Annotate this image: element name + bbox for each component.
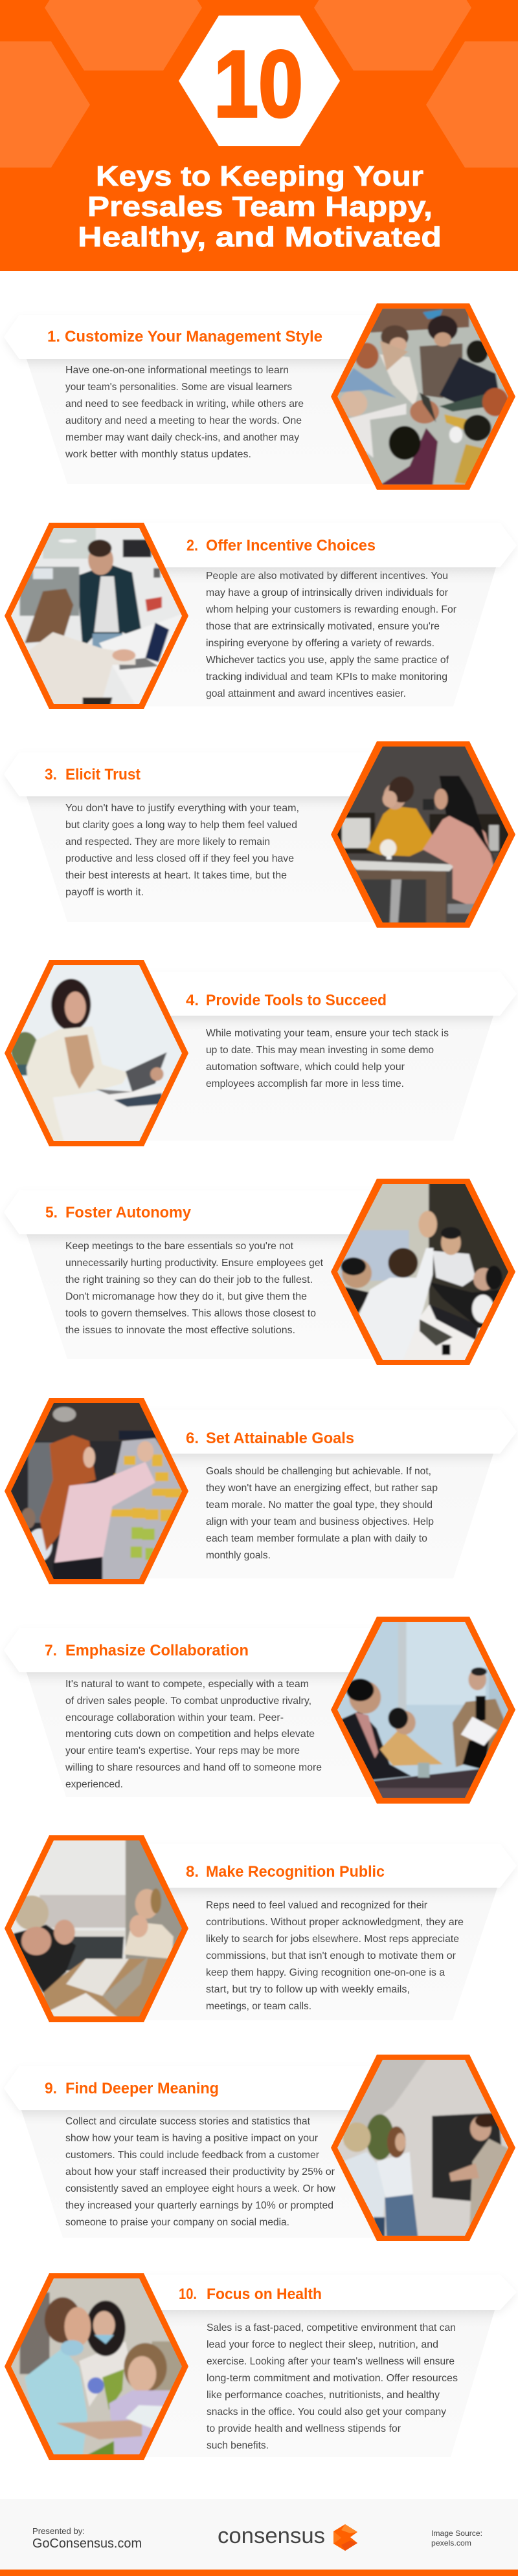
body text 3	[65, 803, 299, 898]
logo wordmark: consensus	[218, 2524, 325, 2548]
heading 9: 9.	[45, 2080, 57, 2097]
image source	[431, 2529, 482, 2548]
body text 8: meetings, or team calls.	[206, 2001, 311, 2012]
photo 8: colleagues clapping	[0, 1835, 192, 2025]
body text 7	[65, 1679, 322, 1790]
body text 5: Keep meetings to the bare essentials so you're not	[65, 1241, 294, 1252]
body text 10	[207, 2322, 458, 2451]
body text 6: monthly goals.	[206, 1550, 271, 1561]
body text 7: experienced.	[65, 1779, 123, 1790]
heading 4: 4.	[186, 992, 199, 1009]
presented by: Presented by:	[32, 2526, 85, 2536]
body text 2: inspiring everyone by offering a variety of rewards.	[206, 638, 434, 649]
heading 10: Focus on Health	[207, 2286, 322, 2303]
body text 9: show how your team is having a positive impact on your	[65, 2133, 319, 2144]
title: Healthy, and Motivated	[78, 221, 442, 253]
body text 9	[65, 2116, 335, 2228]
body text 4: employees accomplish far more in less time.	[206, 1078, 404, 1089]
body text 8	[206, 1900, 464, 2012]
heading 2: 2.	[186, 537, 198, 554]
body text 7: of driven sales people. To combat unproductive rivalry,	[65, 1696, 311, 1707]
body text 2: goal attainment and award incentives easier.	[206, 688, 406, 699]
body text 8: Reps need to feel valued and recognized for their	[206, 1900, 428, 1911]
body text 3: their best interests at heart. It takes time, but the	[65, 870, 287, 881]
body text 4: automation software, which could help your	[206, 1062, 405, 1073]
body text 2: Whichever tactics you use, apply the same practice of	[206, 655, 449, 666]
number hexagon	[179, 16, 340, 146]
panel: 7 emphasize collaboration	[4, 1616, 518, 1806]
body text 10: exercise. Looking after your team's wellness will ensure	[207, 2356, 455, 2367]
body text 5: tools to govern themselves. This allows those closest to	[65, 1308, 316, 1319]
body text 2: those that are extrinsically motivated, ensure you're	[206, 621, 440, 632]
body text 1: member may want daily check-ins, and another may	[65, 432, 299, 443]
image source: Image Source:	[431, 2529, 482, 2538]
body text 10: Sales is a fast-paced, competitive environment that can	[207, 2322, 456, 2333]
title: Presales Team Happy,	[87, 191, 433, 223]
body text 4: up to date. This may mean investing in some demo	[206, 1045, 434, 1056]
body text 3: payoff is worth it.	[65, 887, 144, 898]
heading 6: Set Attainable Goals	[206, 1430, 354, 1447]
body text 2: may have a group of intrinsically driven individuals for	[206, 587, 449, 598]
body text 5: Don't micromanage how they do it, but give them the	[65, 1291, 307, 1302]
photo 1: team hands together	[330, 303, 515, 490]
body text 1: work better with monthly status updates.	[65, 449, 251, 460]
body text 5: the right training so they can do their job to the fullest.	[65, 1274, 313, 1285]
body text 4: While motivating your team, ensure your tech stack is	[206, 1028, 449, 1039]
panel: 4 provide tools to succeed	[0, 958, 517, 1149]
panel: 8 make recognition public	[0, 1835, 517, 2025]
body text 4	[206, 1028, 449, 1089]
footer	[0, 2499, 518, 2576]
body text 7: encourage collaboration within your team. Peer-	[65, 1712, 284, 1723]
presented by: GoConsensus.com	[32, 2537, 142, 2551]
body text 6: they won't have an energizing effect, but rather sap	[206, 1483, 438, 1494]
body text 8: contributions. Without proper acknowledgment, they are	[206, 1917, 464, 1928]
body text 6: Goals should be challenging but achievable. If not,	[206, 1466, 431, 1477]
body text 6: align with your team and business objectives. Help	[206, 1516, 434, 1527]
panel: 5 foster autonomy	[4, 1177, 518, 1367]
body text 2: tracking individual and team KPIs to make monitoring	[206, 671, 447, 682]
panel: 9 find deeper meaning	[4, 2051, 518, 2247]
body text 1: Have one-on-one informational meetings to learn	[65, 365, 289, 376]
body text 6: each team member formulate a plan with daily to	[206, 1533, 427, 1544]
heading 2: Offer Incentive Choices	[206, 537, 376, 554]
heading 8: 8.	[186, 1863, 199, 1881]
title: Keys to Keeping Your	[96, 160, 423, 192]
photo 4: woman with laptop	[0, 958, 192, 1149]
body text 7: willing to share resources and hand off to someone more	[65, 1762, 322, 1773]
photo 5: office high five	[330, 1177, 518, 1367]
body text 10: to provide health and wellness stipends for	[207, 2423, 401, 2434]
body text 5: unnecessarily hurting productivity. Ensure employees get	[65, 1258, 324, 1269]
heading 9: Find Deeper Meaning	[65, 2080, 219, 2097]
body text 1: auditory and need a meeting to hear the words. One	[65, 415, 302, 426]
body text 1	[65, 365, 304, 460]
photo 6: woman placing sticky notes	[0, 1397, 192, 1587]
photo 3: two women talking at a table	[330, 741, 518, 928]
heading 5: 5.	[45, 1204, 58, 1221]
heading 6: 6.	[186, 1430, 199, 1447]
panel: 2 offer incentive choices	[0, 521, 517, 711]
body text 9: about how your staff increased their productivity by 25% or	[65, 2167, 335, 2178]
body text 5	[65, 1241, 324, 1336]
body text 10: snacks in the office. You could also get your company	[207, 2407, 446, 2418]
body text 9: they increased your quarterly earnings by 10% or prompted	[65, 2200, 333, 2211]
heading 10: 10.	[179, 2286, 197, 2303]
body text 8: start, but try to follow up with weekly emails,	[206, 1984, 410, 1995]
panel: 10 focus on health	[0, 2273, 517, 2462]
body text 10: such benefits.	[207, 2440, 269, 2451]
body text 6	[206, 1466, 438, 1561]
panel: 6 set attainable goals	[0, 1397, 517, 1587]
body text 8: likely to search for jobs elsewhere. Most reps appreciate	[206, 1934, 459, 1945]
heading 1: 1.	[47, 328, 60, 345]
body text 3: but clarity goes a long way to help them feel valued	[65, 820, 297, 831]
body text 9: customers. This could include feedback from a customer	[65, 2150, 320, 2161]
body text 8: commissions, but that isn't enough to motivate them or	[206, 1950, 456, 1961]
photo 10: dental team with tablet	[0, 2273, 192, 2462]
body text 1: and need to see feedback in writing, while others are	[65, 398, 304, 409]
body text 3: You don't have to justify everything with your team,	[65, 803, 299, 814]
body text 5: the issues to innovate the most effective solutions.	[65, 1325, 295, 1336]
photo 7: boardroom meeting	[330, 1616, 518, 1806]
body text 9: someone to praise your company on social media.	[65, 2217, 289, 2228]
heading 4: Provide Tools to Succeed	[206, 992, 387, 1009]
photo 9: team at blackboard	[330, 2051, 518, 2247]
panel: 1 customize your management style	[4, 303, 515, 490]
heading 3: 3.	[45, 766, 57, 783]
body text 10: long-term commitment and motivation. Offer resources	[207, 2373, 458, 2384]
header banner	[0, 0, 518, 271]
body text 9: Collect and circulate success stories and statistics that	[65, 2116, 311, 2127]
number hexagon: 10	[214, 31, 303, 136]
heading 5: Foster Autonomy	[65, 1204, 192, 1221]
body text 10: lead your force to neglect their sleep, nutrition, and	[207, 2339, 438, 2350]
body text 2: whom helping your customers is rewarding enough. For	[205, 604, 457, 615]
body text 1: your team's personalities. Some are visual learners	[65, 382, 292, 393]
photo 2: colleagues at laptop	[0, 521, 192, 711]
body text 9: consistently saved an employee eight hours a week. Or how	[65, 2183, 335, 2194]
panel: 3 elicit trust	[4, 741, 518, 928]
title	[78, 160, 442, 253]
body text 2: People are also motivated by different incentives. You	[206, 571, 448, 582]
heading 3: Elicit Trust	[65, 766, 141, 783]
body text 3: productive and less closed off if they feel you have	[65, 853, 294, 864]
body text 6: team morale. No matter the goal type, they should	[206, 1500, 433, 1511]
body text 3: and respected. They are more likely to remain	[65, 836, 270, 847]
heading 7: 7.	[45, 1642, 57, 1659]
image source: pexels.com	[431, 2538, 471, 2548]
presented by	[32, 2526, 142, 2551]
heading 1: Customize Your Management Style	[65, 328, 322, 345]
body text 2	[205, 571, 457, 699]
heading 7: Emphasize Collaboration	[65, 1642, 249, 1659]
body text 7: your entire team's expertise. Your reps may be more	[65, 1745, 300, 1756]
body text 10: like performance coaches, nutritionists, and healthy	[207, 2390, 440, 2401]
body text 8: keep them happy. Giving recognition one-on-one is a	[206, 1967, 445, 1978]
heading 8: Make Recognition Public	[206, 1863, 385, 1881]
body text 7: It's natural to want to compete, especially with a team	[65, 1679, 309, 1690]
icon: consensus logo	[333, 2524, 357, 2551]
body text 7: mentoring cuts down on competition and helps elevate	[65, 1729, 315, 1740]
